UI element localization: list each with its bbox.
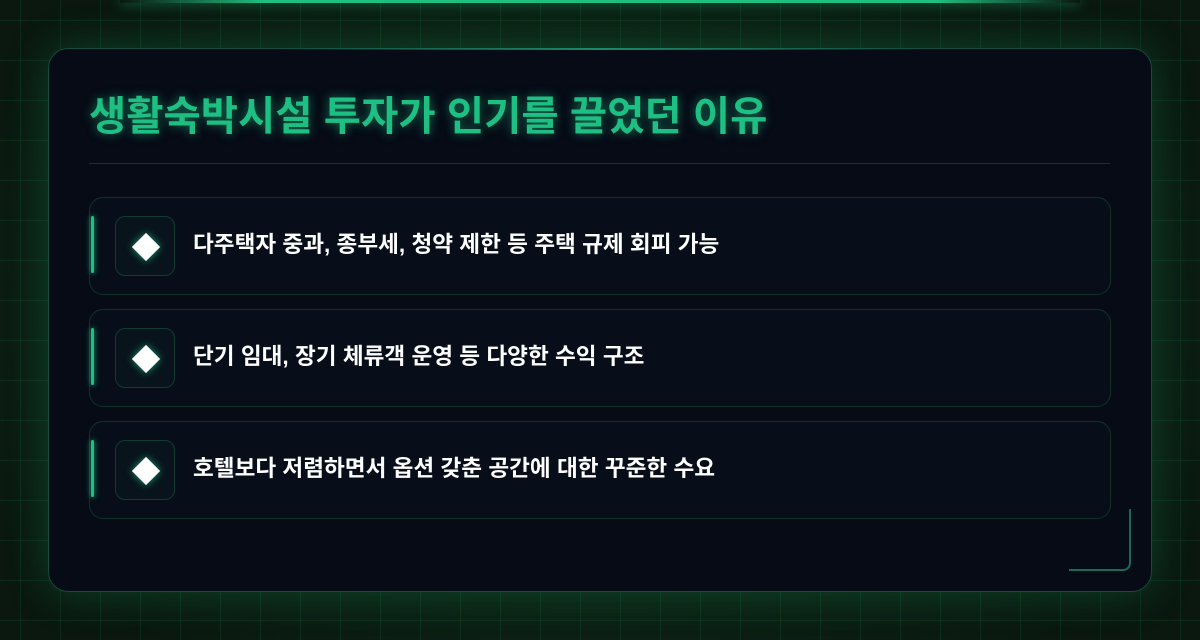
icon: diamond (115, 216, 175, 276)
item 3 (89, 421, 1111, 519)
item 1 (89, 197, 1111, 295)
title: 생활숙박시설 투자가 인기를 끌었던 이유 (89, 93, 767, 139)
icon: diamond (115, 440, 175, 500)
item 2 (89, 309, 1111, 407)
panel: card (48, 48, 1152, 592)
corner bracket (1069, 509, 1131, 571)
text 1: 다주택자 중과, 종부세, 청약 제한 등 주택 규제 회피 가능 (193, 232, 719, 257)
text 2: 단기 임대, 장기 체류객 운영 등 다양한 수익 구조 (193, 344, 644, 369)
icon: diamond (115, 328, 175, 388)
text 3: 호텔보다 저렴하면서 옵션 갖춘 공간에 대한 꾸준한 수요 (193, 456, 715, 481)
